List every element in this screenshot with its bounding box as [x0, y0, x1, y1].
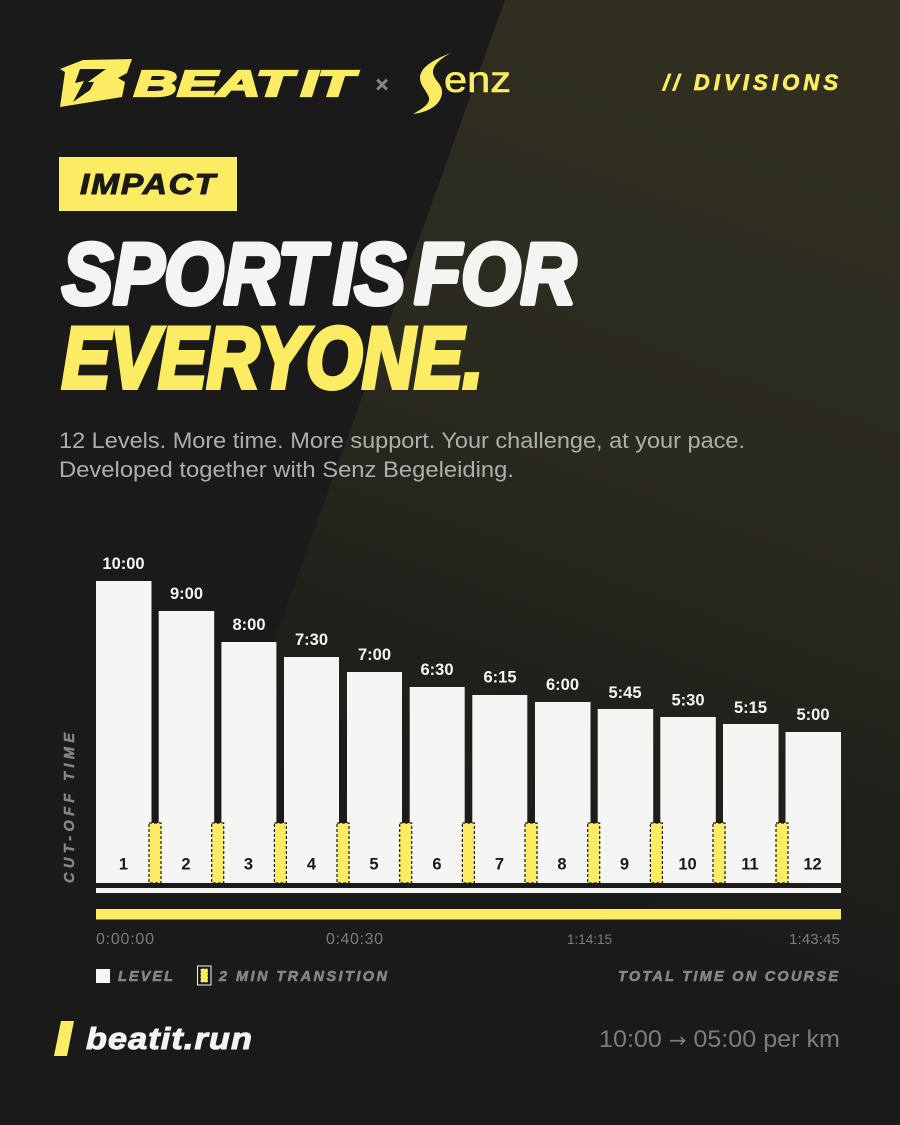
separator x: × — [376, 72, 388, 97]
cut-off values: 5:00 — [796, 706, 830, 724]
title: SPORT IS FOR — [62, 226, 576, 322]
subtitle — [59, 428, 745, 482]
icon: lightning B — [60, 59, 132, 107]
icon: S swoosh — [413, 53, 451, 114]
level numbers: 6 — [432, 856, 442, 874]
time axis labels: 0:00:00 — [96, 931, 154, 948]
legend: total time: TOTAL TIME ON COURSE — [618, 969, 839, 985]
cut-off values: 6:00 — [546, 676, 579, 694]
total time bar — [96, 909, 841, 920]
baseline — [96, 888, 841, 893]
cut-off values: 6:15 — [483, 668, 517, 686]
badge: impact: IMPACT — [80, 169, 218, 201]
legend — [96, 966, 839, 985]
title — [62, 226, 576, 406]
level numbers: 12 — [803, 856, 822, 874]
cut-off values: 8:00 — [232, 616, 266, 634]
level numbers: 2 — [181, 856, 191, 874]
subtitle: 12 Levels. More time. More support. Your challenge, at your pace. — [59, 428, 745, 453]
transition markers — [149, 823, 788, 883]
time axis labels: 1:43:45 — [789, 931, 840, 948]
level numbers: 1 — [119, 856, 128, 874]
cut-off values: 7:30 — [295, 631, 328, 649]
cut-off values — [102, 555, 830, 724]
bar chart — [96, 555, 841, 883]
cut-off values: 5:30 — [671, 692, 705, 710]
cut-off values: 10:00 — [102, 555, 145, 573]
level numbers — [119, 856, 822, 874]
level numbers: 7 — [495, 856, 504, 874]
wordmark: enz — [444, 59, 511, 100]
badge: impact — [59, 157, 237, 211]
logo: Senz — [413, 53, 511, 114]
legend: level: LEVEL — [118, 969, 173, 985]
axis label: cut-off time: CUT-OFF TIME — [62, 732, 78, 883]
time axis labels: 1:14:15 — [567, 932, 612, 947]
level numbers: 3 — [244, 856, 253, 874]
cut-off values: 5:45 — [608, 684, 642, 702]
cut-off values: 6:30 — [420, 661, 454, 679]
level numbers: 4 — [307, 856, 317, 874]
logo: Beat It — [60, 59, 359, 107]
cut-off values: 5:15 — [734, 699, 767, 717]
time axis labels: 0:40:30 — [326, 931, 383, 948]
legend: transition: 2 MIN TRANSITION — [218, 969, 388, 985]
title: EVERYONE. — [62, 310, 483, 406]
level numbers: 9 — [620, 856, 629, 874]
icon: slash — [54, 1021, 74, 1056]
cut-off values: 9:00 — [170, 585, 203, 603]
footer: pace range: 10:00 → 05:00 per km — [599, 1026, 840, 1053]
wordmark: BEAT IT — [134, 63, 359, 104]
level numbers: 8 — [557, 856, 567, 874]
footer: site link: beatit.run — [86, 1021, 253, 1056]
level numbers: 11 — [741, 856, 759, 874]
time axis labels — [96, 931, 840, 948]
bars — [96, 581, 841, 883]
subtitle: Developed together with Senz Begeleiding. — [59, 457, 514, 482]
section label: divisions: // DIVISIONS — [662, 70, 838, 95]
cut-off values: 7:00 — [358, 646, 391, 664]
level numbers: 5 — [369, 856, 379, 874]
level numbers: 10 — [678, 856, 697, 874]
